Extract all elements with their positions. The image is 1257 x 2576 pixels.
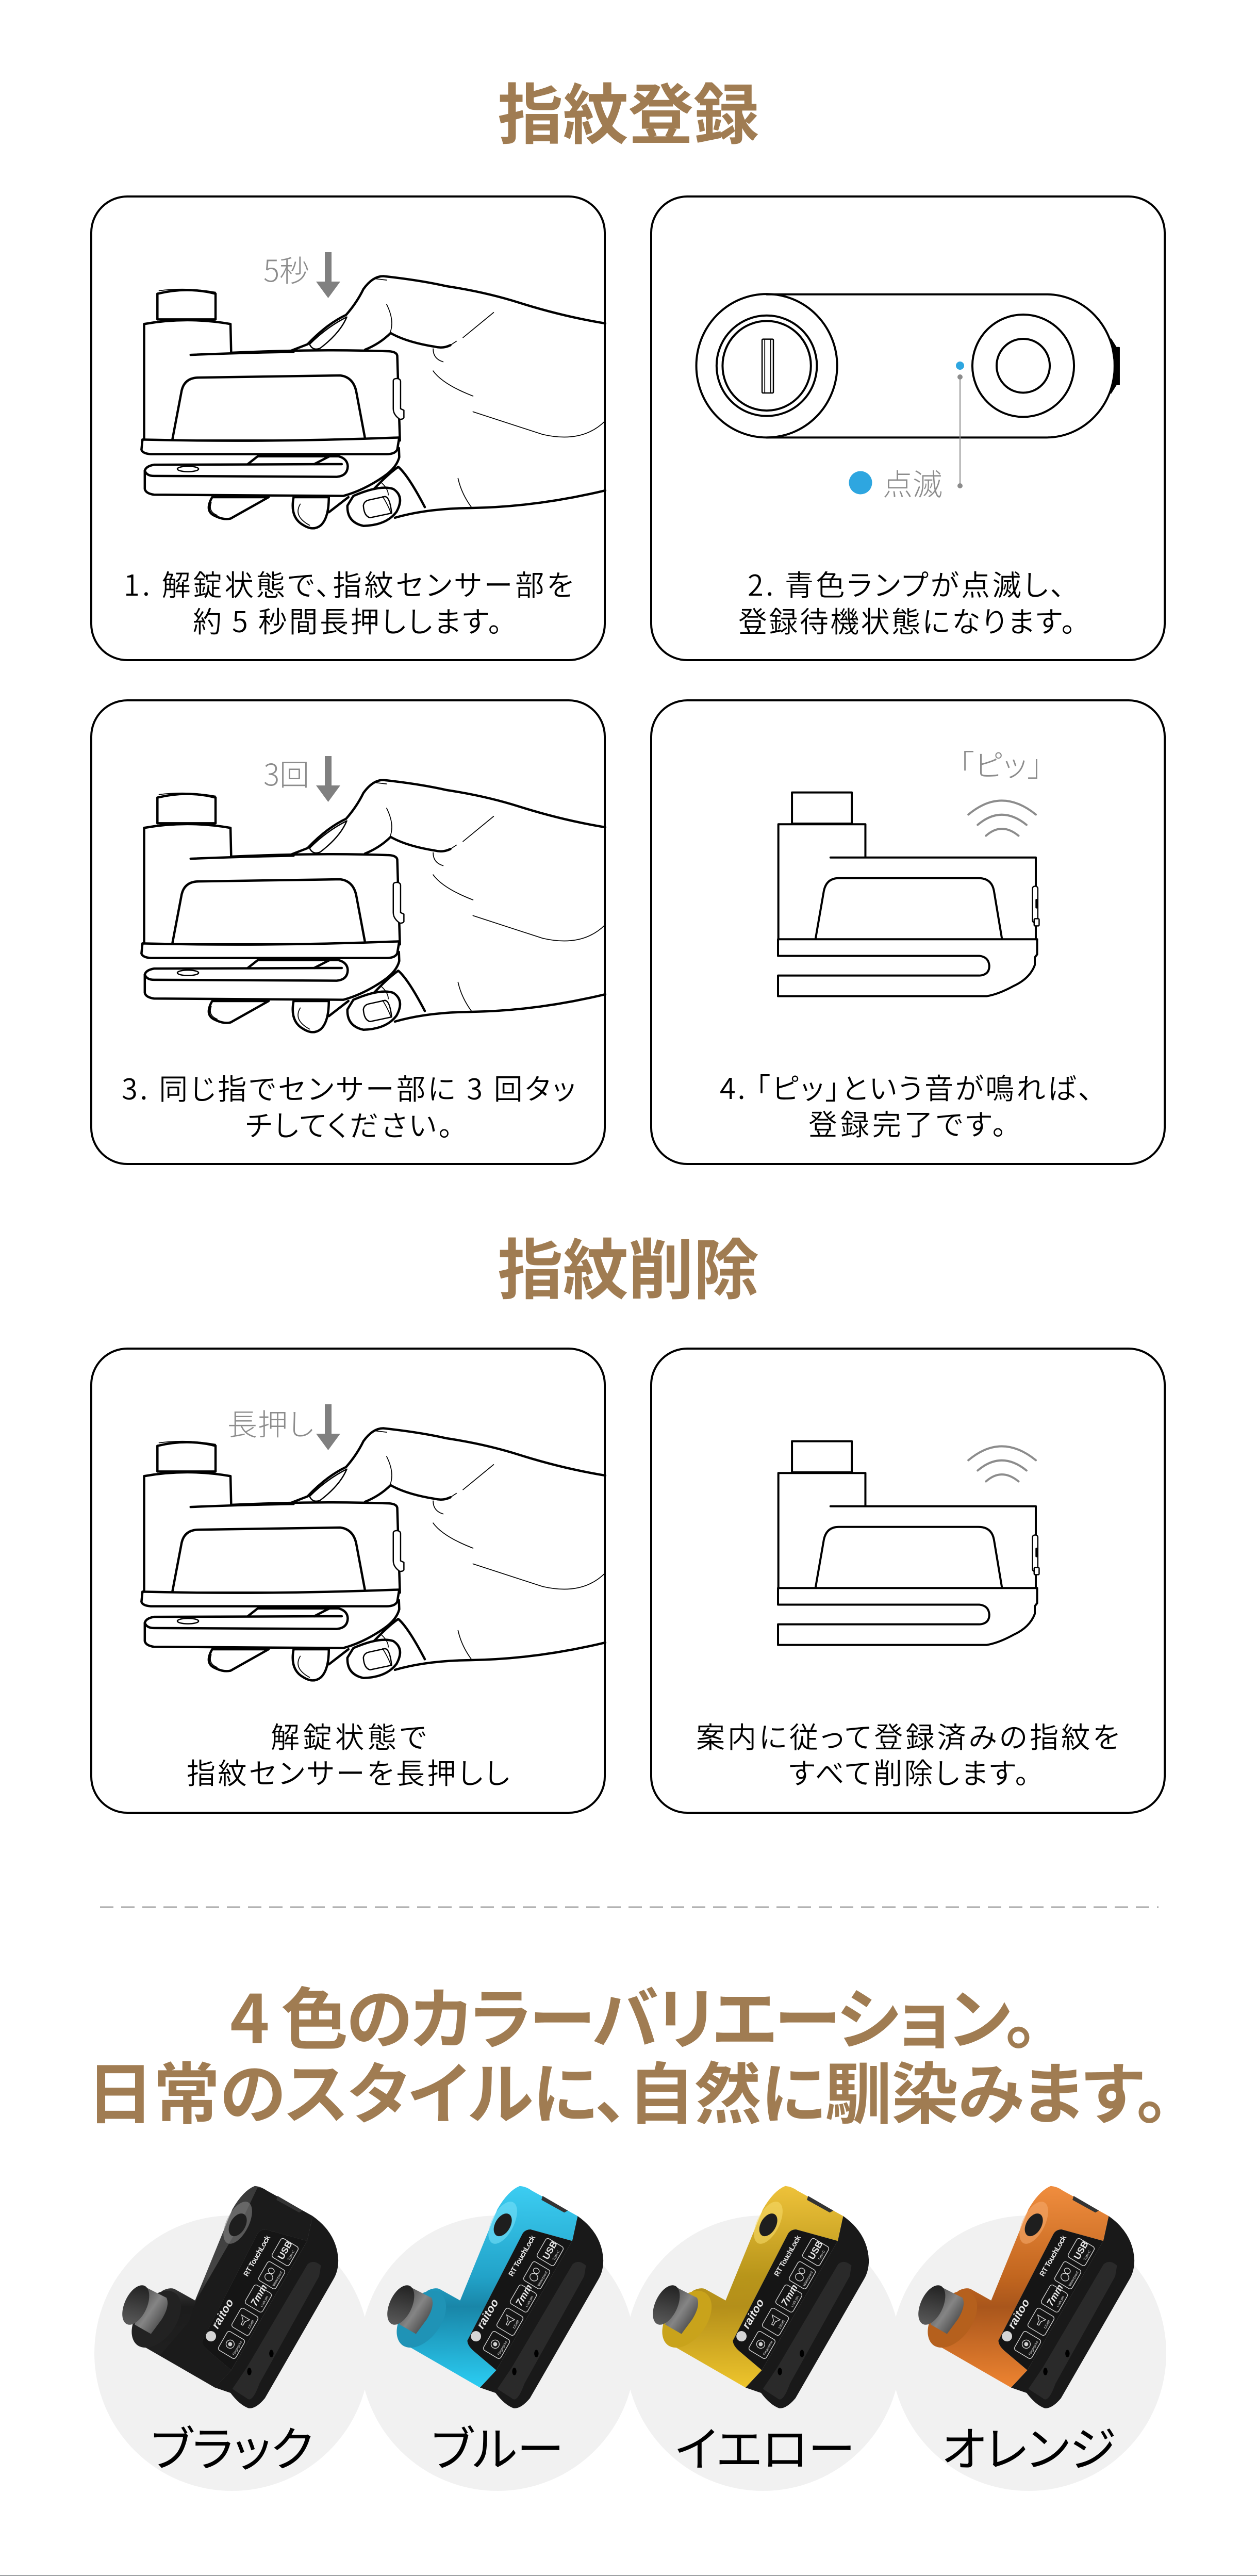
product: orange lock: 7mm [1045, 2283, 1066, 2308]
text: step 2 caption [738, 563, 1076, 641]
product: black lock [117, 2186, 338, 2408]
label: yellow: イエロー [675, 2411, 855, 2480]
text: delete step 1 caption: 解錠状態で [271, 1715, 426, 1757]
product: black lock: raitoo [209, 2296, 236, 2331]
label: orange: オレンジ [941, 2411, 1116, 2480]
product: yellow lock [648, 2186, 869, 2408]
text: delete step 1 caption [187, 1715, 509, 1793]
label: 5 seconds: 5秒 [263, 247, 309, 290]
product: orange lock: Fingerprint [1028, 2340, 1039, 2356]
product: blue lock: 120dB [512, 2320, 520, 2330]
icon: sound waves [968, 800, 1036, 836]
swatch: black [94, 2186, 370, 2491]
text: delete step 2 caption: 案内に従って登録済みの指紋を [696, 1715, 1119, 1757]
product: yellow lock: Fingerprint [763, 2340, 774, 2356]
product: blue lock: Type-C [552, 2250, 560, 2261]
product: orange lock: RT TouchLock [1038, 2234, 1068, 2278]
product: yellow lock: 120dB [778, 2320, 786, 2330]
heading: colour variations: 4 色のカラーバリエーション。 [230, 1966, 1038, 2063]
illustration: lock side view [778, 793, 1039, 996]
illustration: lock side view [778, 1441, 1039, 1645]
product: black lock: Lock pin [260, 2295, 269, 2308]
product: yellow lock: Lock pin [790, 2295, 800, 2308]
product: yellow lock: raitoo [739, 2296, 767, 2331]
label: 3 times: 3回 [263, 751, 309, 794]
product: orange lock: raitoo [1005, 2296, 1032, 2331]
swatch: blue [360, 2186, 635, 2491]
text: delete step 1 caption: 指紋センサーを長押しし [187, 1751, 509, 1793]
label: long press: 長押し [227, 1401, 313, 1444]
text: step 3 caption [122, 1067, 575, 1145]
arrow: tap down [316, 756, 340, 802]
panel: step 2 [651, 196, 1165, 660]
product: black lock: 7mm [249, 2283, 270, 2308]
panel: delete step 2 [651, 1349, 1165, 1813]
text: step 4 caption [720, 1066, 1093, 1144]
text: step 3 caption: 3. 同じ指でセンサー部に 3 回タッ [122, 1067, 575, 1108]
text: delete step 2 caption [696, 1715, 1119, 1793]
illustration: hand long-pressing lock sensor [141, 1429, 605, 1680]
product: blue lock: Fingerprint [497, 2340, 508, 2356]
product: yellow lock: Waterproof [803, 2271, 814, 2287]
product: blue lock: Lock pin [525, 2295, 534, 2308]
text: step 1 caption: 約 5 秒間長押しします。 [193, 599, 502, 641]
swatch: orange [891, 2186, 1166, 2491]
panel: delete step 1 [91, 1349, 605, 1813]
text: step 4 caption: 登録完了です。 [808, 1102, 1006, 1144]
text: step 1 caption [124, 563, 573, 641]
text: step 1 caption: 1. 解錠状態で、指紋センサー部を [124, 563, 573, 604]
product: black lock: RT TouchLock [242, 2234, 272, 2278]
product: orange lock: USB [1072, 2239, 1090, 2261]
title: fingerprint registration: 指紋登録 [498, 62, 759, 157]
product: yellow lock: Type-C [818, 2250, 826, 2261]
icon: sound waves [968, 1446, 1036, 1482]
illustration: hand pressing lock sensor [141, 276, 605, 528]
text: step 2 caption: 2. 青色ランプが点滅し、 [748, 563, 1065, 604]
product: blue lock: Waterproof [537, 2271, 549, 2287]
product: yellow lock: 7mm [780, 2283, 800, 2308]
product: blue lock: USB [541, 2239, 559, 2261]
illustration: hand tapping lock sensor [141, 780, 605, 1032]
product: yellow lock: RT TouchLock [773, 2234, 803, 2278]
heading: colour variations: 日常のスタイルに、自然に馴染みます。 [87, 2041, 1169, 2138]
label: black: ブラック [151, 2411, 313, 2480]
product: orange lock [913, 2186, 1134, 2408]
leader line [957, 374, 963, 488]
panel: step 1 [91, 196, 605, 660]
heading: colour variations [87, 1966, 1169, 2138]
product: orange lock: Waterproof [1068, 2271, 1080, 2287]
product: orange lock: 120dB [1044, 2320, 1051, 2330]
product: orange lock: Type-C [1083, 2250, 1091, 2261]
product: black lock: Type-C [287, 2250, 295, 2261]
product: black lock: 120dB [247, 2320, 255, 2330]
bottom edge line [0, 2575, 1257, 2576]
product: black lock: Waterproof [272, 2271, 284, 2287]
lamp: blue indicator [956, 362, 964, 370]
product: black lock: USB [276, 2239, 294, 2261]
legend dot: blue [849, 471, 872, 494]
title: fingerprint deletion: 指紋削除 [498, 1218, 759, 1312]
text: step 3 caption: チしてください。 [245, 1103, 453, 1145]
product: black lock: Fingerprint [232, 2340, 243, 2356]
product: orange lock: Lock pin [1056, 2295, 1065, 2308]
text: step 2 caption: 登録待機状態になります。 [738, 599, 1076, 641]
panel: step 3 [91, 700, 605, 1164]
text: delete step 2 caption: すべて削除します。 [789, 1751, 1029, 1793]
product: blue lock [382, 2186, 603, 2408]
product: yellow lock: USB [806, 2239, 825, 2261]
label: blinking: 点滅 [883, 461, 942, 504]
divider [100, 1906, 1159, 1908]
swatch: yellow [625, 2186, 901, 2491]
text: step 4 caption: 4. 「ピッ」という音が鳴れば、 [720, 1066, 1093, 1108]
panel: step 4 [651, 700, 1165, 1164]
illustration: lock top view with blinking lamp [697, 294, 1119, 437]
product: blue lock: raitoo [474, 2296, 501, 2331]
arrow: long press [316, 1404, 340, 1450]
label: blue: ブルー [431, 2411, 564, 2480]
label: beep: 「ピッ」 [959, 742, 1043, 785]
product: blue lock: 7mm [514, 2283, 535, 2308]
product: blue lock: RT TouchLock [507, 2234, 537, 2278]
arrow: press down [316, 252, 340, 298]
